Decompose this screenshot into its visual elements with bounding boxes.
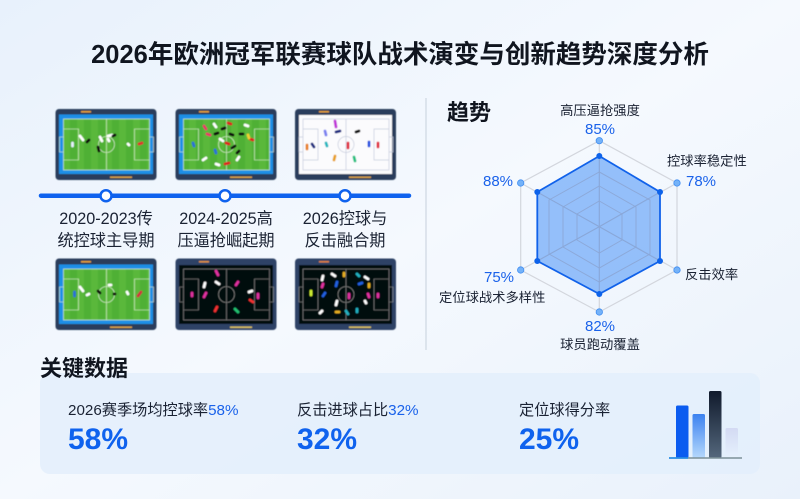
phase label 2: 2024-2025高 xyxy=(179,210,273,228)
heading: key data: 关键数据 xyxy=(40,356,128,381)
stat: possession: 2026赛季场均控球率58% xyxy=(68,401,239,419)
tablet: green pitch top left xyxy=(56,109,156,180)
radar value: 75: 75% xyxy=(484,269,514,286)
icon: bar chart xyxy=(669,391,742,458)
divider xyxy=(425,98,427,350)
radar outer points xyxy=(518,138,680,315)
tablet: dark board bottom right xyxy=(295,258,396,330)
panel: key data xyxy=(40,373,760,474)
stat: set piece xyxy=(519,402,610,456)
phase label 1: 统控球主导期 xyxy=(57,232,155,250)
radar value: 78: 78% xyxy=(686,173,716,190)
tablet: dark board bottom middle xyxy=(176,258,276,330)
phase label 2: 压逼抢崛起期 xyxy=(177,232,275,250)
radar data points xyxy=(534,153,663,297)
tablet: green pitch bottom left xyxy=(56,258,156,330)
radar label: counter: 反击效率 xyxy=(685,266,738,282)
phase label 3: 反击融合期 xyxy=(305,232,385,250)
stat: possession: 58% xyxy=(68,423,128,456)
radar grid xyxy=(521,141,677,312)
radar label: set piece: 定位球战术多样性 xyxy=(439,289,545,305)
heading: trend: 趋势 xyxy=(447,100,491,125)
stat: set piece: 25% xyxy=(519,423,579,456)
stat: possession xyxy=(68,401,239,456)
radar inner rings xyxy=(537,156,660,294)
radar value: 88: 88% xyxy=(483,173,513,190)
radar label: press: 高压逼抢强度 xyxy=(560,102,640,118)
stat: set piece: 定位球得分率 xyxy=(519,402,610,419)
radar label: possession: 控球率稳定性 xyxy=(667,152,747,168)
timeline xyxy=(41,190,409,201)
tablet: white tactics board top right xyxy=(295,109,396,180)
tablet: high press top middle xyxy=(176,109,276,180)
title: 2026年欧洲冠军联赛球队战术演变与创新趋势深度分析 xyxy=(91,40,709,69)
radar data area xyxy=(537,156,660,294)
stat: counter goals: 32% xyxy=(297,423,357,456)
radar value: 82: 82% xyxy=(585,318,615,335)
radar label: running: 球员跑动覆盖 xyxy=(560,337,640,352)
radar chart xyxy=(518,138,680,315)
phase label 3: 2026控球与 xyxy=(303,210,387,228)
radar value: 85: 85% xyxy=(585,121,615,138)
stat: counter goals xyxy=(297,402,419,456)
stat: counter goals: 反击进球占比32% xyxy=(297,402,419,419)
phase label 1: 2020-2023传 xyxy=(59,210,153,228)
